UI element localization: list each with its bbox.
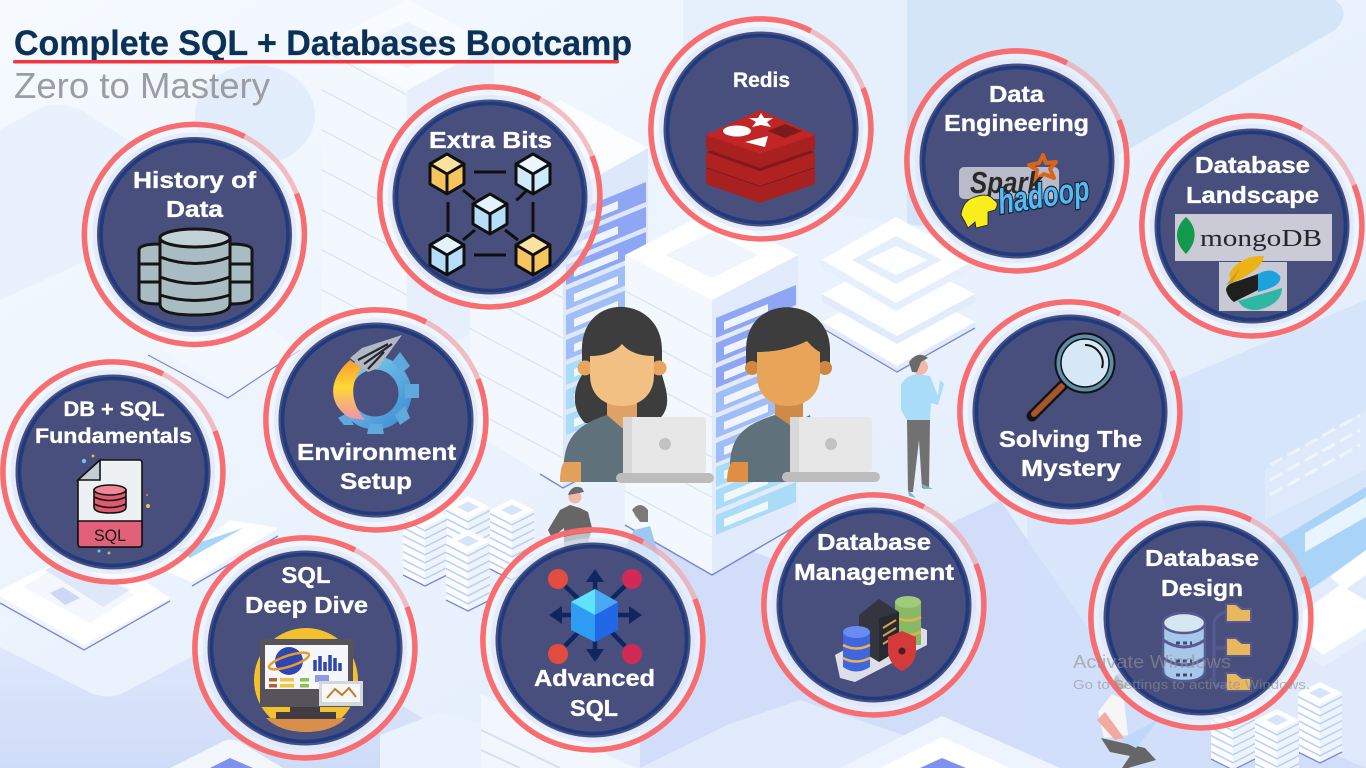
platform: stacked diamonds xyxy=(822,217,975,372)
panel: DB + SQL Fundamentals xyxy=(3,362,223,582)
panel: Extra Bits xyxy=(380,87,600,307)
panel: Database Management xyxy=(764,495,984,715)
icon: connected cubes xyxy=(430,154,550,275)
label: Mystery xyxy=(1021,455,1121,481)
label: Database xyxy=(817,529,931,555)
label: Database xyxy=(1145,545,1259,571)
icon: rocket and gear xyxy=(333,335,419,434)
label: Data xyxy=(989,81,1044,107)
icon: database stack xyxy=(139,229,252,315)
figure: seated person with laptop xyxy=(1097,673,1160,768)
label: Database xyxy=(1195,152,1310,178)
watermark: Activate Windows xyxy=(1073,652,1310,692)
label: Environment xyxy=(297,439,456,465)
label: Extra Bits xyxy=(429,127,552,153)
panel: Environment Setup xyxy=(266,310,486,530)
icon: MongoDB logo xyxy=(1175,214,1332,261)
label: Setup xyxy=(340,468,412,494)
label: Solving The xyxy=(999,426,1142,452)
panel: Database Landscape xyxy=(1142,116,1362,336)
title: Complete SQL + Databases Bootcamp xyxy=(14,24,632,63)
platform: bottom-left xyxy=(0,520,278,652)
label: Management xyxy=(794,559,954,585)
label: SQL xyxy=(282,562,330,588)
figure: woman with laptop xyxy=(560,307,714,483)
figure: standing person xyxy=(901,355,944,498)
icon: Spark and Hadoop logos xyxy=(959,155,1092,228)
label xyxy=(35,398,192,448)
icon: SQL file: SQL xyxy=(94,526,126,545)
subtitle: Zero to Mastery xyxy=(14,65,270,106)
panel: Solving The Mystery xyxy=(960,302,1180,522)
bottom diamonds xyxy=(170,694,1010,768)
label: DB + SQL xyxy=(64,398,165,421)
figures: two learners and small staff xyxy=(548,307,1160,768)
label xyxy=(944,81,1089,136)
icon: Spark and Hadoop logos: Spark xyxy=(970,165,1043,200)
label xyxy=(133,167,256,222)
icon: database and folders xyxy=(1163,604,1251,691)
label xyxy=(999,426,1142,481)
label: Redis xyxy=(733,69,790,92)
label xyxy=(794,529,954,585)
figure: two people talking xyxy=(548,487,660,570)
title block xyxy=(13,24,632,106)
label xyxy=(297,439,456,494)
panel: Advanced SQL xyxy=(483,530,703,750)
label: Deep Dive xyxy=(245,592,368,618)
platform with panel, right edge xyxy=(1265,410,1366,667)
label: Data xyxy=(166,196,223,222)
small server stacks bottom-right xyxy=(1211,682,1342,768)
panel: History of Data xyxy=(84,124,304,344)
icon: server, cylinders and shield xyxy=(835,596,927,682)
icon: Redis logo xyxy=(706,110,815,203)
watermark: Activate Windows: Activate Windows xyxy=(1073,652,1231,672)
label: Fundamentals xyxy=(35,425,192,448)
panel: Redis xyxy=(651,19,871,239)
label: SQL xyxy=(570,695,618,721)
icon: MongoDB logo: mongoDB xyxy=(1200,226,1322,252)
label: History of xyxy=(133,167,256,193)
panel: Database Design xyxy=(1091,508,1311,728)
label xyxy=(534,665,655,721)
figure: man with laptop xyxy=(727,307,880,482)
icon: hub and arrows xyxy=(548,569,642,664)
small server stacks centre-left xyxy=(403,496,534,611)
icon: Elastic logo xyxy=(1219,256,1287,311)
label: Engineering xyxy=(944,110,1089,136)
label: Advanced xyxy=(534,665,655,691)
label xyxy=(1145,545,1259,601)
icon: magnifying glass xyxy=(1032,334,1114,416)
label: Design xyxy=(1161,575,1243,601)
icon: Spark and Hadoop logos: hadoop xyxy=(995,169,1092,222)
label xyxy=(245,562,368,618)
icon: SQL file xyxy=(78,455,150,554)
icon: monitor with chart xyxy=(254,628,363,732)
label: Landscape xyxy=(1186,182,1319,208)
server tower: centre xyxy=(625,210,798,575)
platform: under history panel xyxy=(148,300,300,398)
title underline xyxy=(13,60,619,64)
label xyxy=(1186,152,1319,208)
panel: Data Engineering xyxy=(907,51,1127,271)
panel: SQL Deep Dive xyxy=(195,538,415,758)
watermark: Activate Windows: Go to Settings to activate Windows. xyxy=(1073,677,1310,692)
